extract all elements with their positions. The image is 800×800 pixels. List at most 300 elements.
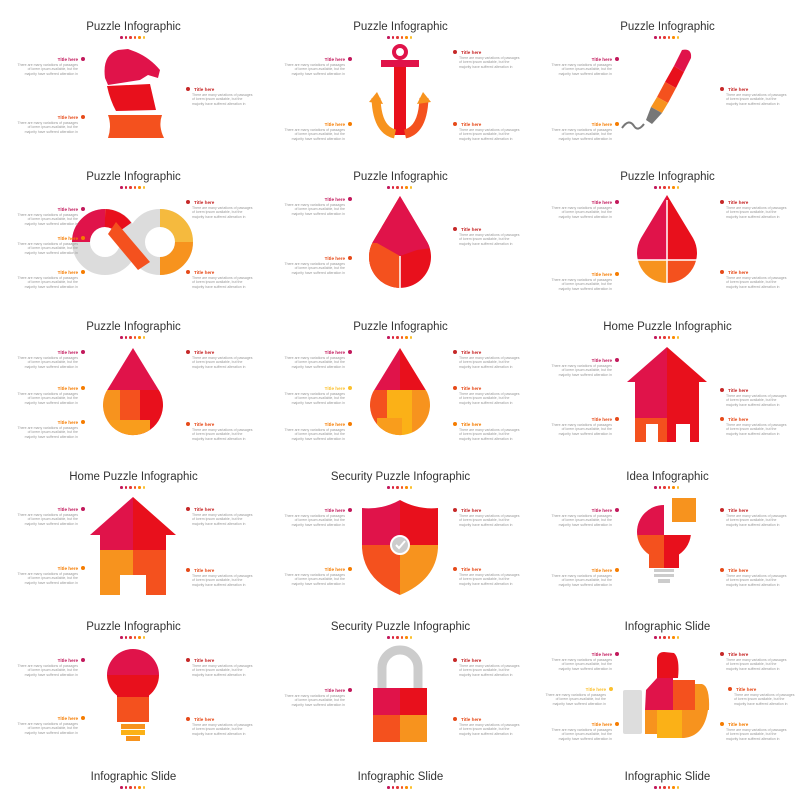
text: left 1 <box>17 207 85 226</box>
text: right 2 <box>453 122 520 141</box>
text: left 2: There are many variations of passages <box>284 392 345 396</box>
text: right 3: There are many variations of passages <box>459 428 520 432</box>
text: left 2: majority have suffered alteration in <box>559 432 612 436</box>
shield puzzle <box>362 500 438 595</box>
dots <box>387 336 415 339</box>
text: right: There are many variations of passages <box>726 93 787 97</box>
text: right 2 <box>192 717 262 736</box>
text: right: majority have suffered alteration in <box>459 242 512 246</box>
text: left 1: Title here <box>592 652 612 657</box>
title: Infographic Slide <box>358 771 443 783</box>
text: left 2: of lorem ipsum available, but the <box>28 726 78 730</box>
text: right 1: of lorem ipsum available, but the <box>459 518 509 522</box>
text: left 1: of lorem ipsum available, but the <box>28 360 78 364</box>
text: right 1: Title here <box>728 652 748 657</box>
text: right <box>186 87 253 106</box>
text: right 1: Title here <box>728 388 748 393</box>
text: right 2: of lorem ipsum available, but the <box>192 432 242 436</box>
text: right 1: Title here <box>728 508 748 513</box>
text: right 1: There are many variations of passages <box>192 206 253 210</box>
text: left 1: majority have suffered alteration in <box>25 72 78 76</box>
text: right 1: majority have suffered alteration in <box>459 523 512 527</box>
text: right 2: There are many variations of passages <box>192 574 253 578</box>
text: left 2: There are many variations of passages <box>545 693 606 697</box>
text: left 1: majority have suffered alteration in <box>292 212 345 216</box>
text: left 1 <box>551 57 619 76</box>
text: left 3: majority have suffered alteration in <box>292 437 345 441</box>
text: right 1 <box>720 200 787 219</box>
text: right 2: majority have suffered alteration in <box>192 732 245 736</box>
text: left 1: of lorem ipsum available, but the <box>562 518 612 522</box>
text: left 3: of lorem ipsum available, but the <box>28 280 78 284</box>
text: right 2: majority have suffered alteration in <box>192 583 245 587</box>
text: left 2: majority have suffered alteration in <box>292 137 345 141</box>
slide: lock <box>267 600 534 750</box>
slide: brush <box>551 21 787 141</box>
text: left 1: Title here <box>58 507 78 512</box>
text: right 2: Title here <box>728 568 748 573</box>
drop puzzle <box>370 348 430 436</box>
text: right 3: majority have suffered alteration in <box>726 737 779 741</box>
text: left 1: of lorem ipsum available, but the <box>562 368 612 372</box>
text: right 2 <box>734 687 800 706</box>
text: right 1: majority have suffered alteration in <box>192 673 245 677</box>
text: left 1 <box>275 350 345 369</box>
slide: bulb <box>17 621 253 741</box>
text: left 1: of lorem ipsum available, but the <box>295 360 345 364</box>
text: right 1 <box>192 658 262 677</box>
text: left 2 <box>284 122 352 141</box>
text: left 1 <box>542 358 612 377</box>
text: left 2: of lorem ipsum available, but the <box>295 266 345 270</box>
text: left 2: There are many variations of passages <box>284 262 345 266</box>
text: left 2: Title here <box>592 272 612 277</box>
text: right 1 <box>192 507 262 526</box>
text: left 2: There are many variations of passages <box>284 128 345 132</box>
title: Security Puzzle Infographic <box>331 471 470 483</box>
text: left 2: There are many variations of passages <box>17 392 78 396</box>
text: left 3: Title here <box>58 270 78 275</box>
text: left 1 <box>542 652 612 671</box>
dots <box>387 186 412 189</box>
text: left 1 <box>551 200 619 219</box>
text: right 2: Title here <box>194 717 214 722</box>
title: Puzzle Infographic <box>353 171 448 183</box>
text: right 2: of lorem ipsum available, but the <box>192 280 242 284</box>
text: left 1: There are many variations of passages <box>551 658 612 662</box>
text: left: Title here <box>325 688 345 693</box>
text: left 2: of lorem ipsum available, but the <box>562 132 612 136</box>
drop puzzle <box>637 195 697 283</box>
text: left 2: majority have suffered alteration in <box>559 287 612 291</box>
text: left 2: Title here <box>592 122 612 127</box>
text: right 2: of lorem ipsum available, but the <box>726 280 776 284</box>
text: left 2: majority have suffered alteration in <box>25 731 78 735</box>
text: left 1: of lorem ipsum available, but the <box>295 67 345 71</box>
text: right 1: of lorem ipsum available, but the <box>192 360 242 364</box>
slide: infinity <box>17 171 253 289</box>
slide: shield <box>284 471 520 595</box>
text: right 1: Title here <box>461 350 481 355</box>
text: left 2: Title here <box>325 256 345 261</box>
text: left 2 <box>17 386 85 405</box>
text: left 3 <box>275 422 345 441</box>
dots <box>654 336 682 339</box>
text: left 1: Title here <box>592 358 612 363</box>
text: left 2: There are many variations of passages <box>551 278 612 282</box>
text: left 2: of lorem ipsum available, but the <box>562 282 612 286</box>
text: left: of lorem ipsum available, but the <box>295 698 345 702</box>
text: left 2: majority have suffered alteration in <box>292 401 345 405</box>
title: Infographic Slide <box>625 771 710 783</box>
text: left 2: of lorem ipsum available, but the <box>28 125 78 129</box>
text: left 2 <box>551 272 619 291</box>
text: right 2: of lorem ipsum available, but the <box>459 396 509 400</box>
text: left 1: There are many variations of passages <box>17 63 78 67</box>
text: left 1 <box>542 508 612 527</box>
text: right 2 <box>459 717 529 736</box>
dots <box>654 486 682 489</box>
text: right 2: majority have suffered alteration in <box>459 582 512 586</box>
text: left 1: There are many variations of passages <box>17 213 78 217</box>
text: left 2: There are many variations of passages <box>284 573 345 577</box>
title: Puzzle Infographic <box>353 321 448 333</box>
dots <box>387 36 412 39</box>
text: right <box>720 87 787 106</box>
text: left: majority have suffered alteration in <box>292 703 345 707</box>
text: right: Title here <box>461 227 481 232</box>
text: right 1: of lorem ipsum available, but the <box>192 210 242 214</box>
text: right 2 <box>726 568 796 587</box>
text: left 2: Title here <box>58 566 78 571</box>
text: left 2: There are many variations of passages <box>17 722 78 726</box>
text: left 3: of lorem ipsum available, but the <box>295 432 345 436</box>
dots <box>120 186 145 189</box>
text: left 1: majority have suffered alteration in <box>559 215 612 219</box>
text: left 3: Title here <box>58 420 78 425</box>
text: right 1: There are many variations of passages <box>726 514 787 518</box>
text: right 1: There are many variations of passages <box>459 514 520 518</box>
text: left 3: There are many variations of passages <box>284 428 345 432</box>
text: left 2 <box>275 567 345 586</box>
text: left 1: Title here <box>592 57 612 62</box>
text: right 1: Title here <box>461 658 481 663</box>
dots <box>654 186 679 189</box>
text: left 3: majority have suffered alteration in <box>25 285 78 289</box>
text: right 2: There are many variations of passages <box>192 276 253 280</box>
text: left: There are many variations of passages <box>284 694 345 698</box>
text: left 2: There are many variations of passages <box>551 574 612 578</box>
text: left 2: Title here <box>58 236 78 241</box>
text: left 3 <box>17 270 85 289</box>
text: left 1: Title here <box>325 57 345 62</box>
text: right 1: Title here <box>194 200 214 205</box>
text: left 2: of lorem ipsum available, but the <box>562 427 612 431</box>
text: left 2 <box>8 566 78 585</box>
text: right 2: of lorem ipsum available, but the <box>459 577 509 581</box>
text: right 2: majority have suffered alteration in <box>459 137 512 141</box>
text: left 1: of lorem ipsum available, but the <box>562 662 612 666</box>
text: right 2: majority have suffered alteration in <box>734 702 787 706</box>
text: left 1: There are many variations of passages <box>17 513 78 517</box>
text: right 1: Title here <box>728 200 748 205</box>
text: right 2: of lorem ipsum available, but the <box>734 697 784 701</box>
text: left 2 <box>542 568 612 587</box>
text: left 2 <box>17 236 85 255</box>
text: left 1: There are many variations of passages <box>284 356 345 360</box>
text: left 1: There are many variations of passages <box>284 203 345 207</box>
text: right 2: of lorem ipsum available, but the <box>459 727 509 731</box>
title: Idea Infographic <box>626 471 709 483</box>
text: left 2: Title here <box>325 122 345 127</box>
slide: drop 4 pieces <box>551 171 787 291</box>
slide: drop 6 pieces <box>284 321 520 441</box>
title: Puzzle Infographic <box>86 171 181 183</box>
text: right: There are many variations of passages <box>192 93 253 97</box>
dots <box>654 786 682 789</box>
text: right 2: Title here <box>194 568 214 573</box>
text: left 2: Title here <box>586 687 606 692</box>
title: Puzzle Infographic <box>620 171 715 183</box>
drop puzzle <box>103 348 163 436</box>
text: left 1: majority have suffered alteration in <box>559 667 612 671</box>
text: left 2: of lorem ipsum available, but the <box>28 246 78 250</box>
text: right <box>453 227 520 246</box>
text: left 1 <box>275 508 345 527</box>
text: left 2 <box>275 386 345 405</box>
text: right 2: majority have suffered alteration in <box>192 437 245 441</box>
title: Infographic Slide <box>91 771 176 783</box>
infinity puzzle <box>72 209 193 275</box>
text: left 2: of lorem ipsum available, but the <box>556 697 606 701</box>
slide: drop 5 pieces <box>17 321 253 441</box>
text: left 1: There are many variations of passages <box>284 514 345 518</box>
text: right 2: There are many variations of passages <box>192 428 253 432</box>
text: right: of lorem ipsum available, but the <box>726 97 776 101</box>
text: right 1: of lorem ipsum available, but the <box>459 668 509 672</box>
text: left 1: of lorem ipsum available, but the <box>28 668 78 672</box>
text: left 1: of lorem ipsum available, but the <box>295 518 345 522</box>
text: right 1: majority have suffered alteration in <box>192 522 245 526</box>
text: left 1: majority have suffered alteration in <box>292 365 345 369</box>
text: right 3 <box>726 722 796 741</box>
title: Puzzle Infographic <box>353 21 448 33</box>
title: Puzzle Infographic <box>86 21 181 33</box>
text: right 2 <box>459 386 529 405</box>
text: left 1 <box>17 350 85 369</box>
text: right 1 <box>459 350 529 369</box>
text: left 1: Title here <box>58 57 78 62</box>
text: left 2: of lorem ipsum available, but the <box>295 132 345 136</box>
text: right 2 <box>726 417 796 436</box>
text: left 2: of lorem ipsum available, but the <box>295 577 345 581</box>
text: left 1: majority have suffered alteration in <box>559 72 612 76</box>
text: right 1: Title here <box>194 507 214 512</box>
text: left 2: There are many variations of passages <box>17 572 78 576</box>
text: right 1: of lorem ipsum available, but the <box>192 517 242 521</box>
slide: idea <box>551 471 787 587</box>
text: right: of lorem ipsum available, but the <box>459 237 509 241</box>
text: left 2: Title here <box>58 716 78 721</box>
text: right 1 <box>459 508 529 527</box>
text: right: Title here <box>194 87 214 92</box>
text: right 2: There are many variations of passages <box>459 573 520 577</box>
text: right: Title here <box>728 87 748 92</box>
text: right 2: majority have suffered alteration in <box>726 432 779 436</box>
text: right 3: of lorem ipsum available, but the <box>726 732 776 736</box>
text: left 3 <box>17 420 85 439</box>
text: right 1: There are many variations of passages <box>726 658 787 662</box>
text: left 3: There are many variations of passages <box>551 728 612 732</box>
bulb puzzle <box>107 649 159 741</box>
text: left 2: Title here <box>592 568 612 573</box>
dots <box>387 486 415 489</box>
text: right 1 <box>453 50 520 69</box>
text: right 2 <box>186 270 253 289</box>
text: left 2: Title here <box>592 417 612 422</box>
text: left 2: majority have suffered alteration in <box>25 130 78 134</box>
dots <box>654 636 682 639</box>
knight puzzle <box>104 49 164 138</box>
text: right 2: of lorem ipsum available, but the <box>192 578 242 582</box>
text: left 2 <box>17 115 85 134</box>
text: left 2: majority have suffered alteration in <box>25 251 78 255</box>
text: right 2 <box>720 270 787 289</box>
text: right 1: There are many variations of passages <box>192 664 253 668</box>
text: left 1: There are many variations of passages <box>551 364 612 368</box>
title: Home Puzzle Infographic <box>603 321 732 333</box>
text: right 1: majority have suffered alteration in <box>459 673 512 677</box>
text: left 2 <box>536 687 606 706</box>
text: right 2: There are many variations of passages <box>734 693 795 697</box>
dots <box>387 786 415 789</box>
title: Puzzle Infographic <box>86 321 181 333</box>
text: right 2: of lorem ipsum available, but the <box>726 427 776 431</box>
text: left 3: of lorem ipsum available, but the <box>562 732 612 736</box>
text: left 3: There are many variations of passages <box>17 426 78 430</box>
text: right 2 <box>192 422 262 441</box>
text: left 2: There are many variations of passages <box>17 121 78 125</box>
text: left 1: of lorem ipsum available, but the <box>562 67 612 71</box>
text: right 1: of lorem ipsum available, but the <box>726 518 776 522</box>
text: right 2: of lorem ipsum available, but the <box>192 727 242 731</box>
text: right 2: majority have suffered alteration in <box>192 285 245 289</box>
text: left 1: majority have suffered alteration in <box>559 523 612 527</box>
text: right 1: majority have suffered alteration in <box>459 65 512 69</box>
text: right 2 <box>192 568 262 587</box>
text: right 1: There are many variations of passages <box>726 206 787 210</box>
text: left 2 <box>542 417 612 436</box>
text: right 1: Title here <box>194 658 214 663</box>
dots <box>120 486 148 489</box>
bulb puzzle <box>637 498 696 583</box>
text: right: of lorem ipsum available, but the <box>192 97 242 101</box>
text: left 3: majority have suffered alteration in <box>25 435 78 439</box>
title: Security Puzzle Infographic <box>331 621 470 633</box>
text: left 2: majority have suffered alteration in <box>553 702 606 706</box>
title: Puzzle Infographic <box>620 21 715 33</box>
text: left 3: Title here <box>592 722 612 727</box>
text: left 1: Title here <box>592 508 612 513</box>
text: left 2: majority have suffered alteration in <box>292 582 345 586</box>
text: right 1 <box>726 508 796 527</box>
lock puzzle <box>267 600 534 750</box>
text: right 1: majority have suffered alteration in <box>726 215 779 219</box>
text: right 1: majority have suffered alteration in <box>726 403 779 407</box>
text: right 1: of lorem ipsum available, but the <box>726 662 776 666</box>
slide: drop 3 pieces <box>284 171 520 288</box>
text: left 1: Title here <box>58 350 78 355</box>
text: right 1: Title here <box>461 508 481 513</box>
text: left 3: Title here <box>325 422 345 427</box>
text: left 1: Title here <box>58 207 78 212</box>
dots <box>120 636 148 639</box>
text: left 1: There are many variations of passages <box>551 206 612 210</box>
text: left 2 <box>8 716 78 735</box>
text: right 2 <box>459 567 529 586</box>
anchor puzzle <box>369 44 431 138</box>
title: Infographic Slide <box>625 621 710 633</box>
house puzzle <box>0 450 267 600</box>
house puzzle <box>534 300 800 450</box>
text: right: majority have suffered alteration in <box>726 102 779 106</box>
text: left 3: There are many variations of passages <box>17 276 78 280</box>
text: left 2: majority have suffered alteration in <box>25 581 78 585</box>
text: left 2: There are many variations of passages <box>551 128 612 132</box>
text: right 2: Title here <box>461 717 481 722</box>
text: left 1: of lorem ipsum available, but the <box>562 210 612 214</box>
text: right 2: There are many variations of passages <box>726 423 787 427</box>
text: left 1: majority have suffered alteration in <box>25 522 78 526</box>
text: left 1: majority have suffered alteration in <box>292 72 345 76</box>
text: left 2: Title here <box>58 115 78 120</box>
text: right 1: majority have suffered alteration in <box>192 365 245 369</box>
text: right 1 <box>459 658 529 677</box>
text: left 1 <box>8 507 78 526</box>
text: left 2: of lorem ipsum available, but the <box>28 396 78 400</box>
text: right 3: majority have suffered alteration in <box>459 437 512 441</box>
text: right 1: Title here <box>194 350 214 355</box>
text: right 1: of lorem ipsum available, but the <box>459 60 509 64</box>
text: right 2: majority have suffered alteration in <box>459 732 512 736</box>
text: right 2: There are many variations of passages <box>459 392 520 396</box>
text: left 2: There are many variations of passages <box>551 423 612 427</box>
text: right 2: Title here <box>461 122 481 127</box>
text: left 1 <box>284 57 352 76</box>
text: right 1: of lorem ipsum available, but the <box>726 210 776 214</box>
text: right 2: There are many variations of passages <box>459 128 520 132</box>
text: right 1: There are many variations of passages <box>459 56 520 60</box>
text: left 1 <box>284 197 352 216</box>
text: left 1: Title here <box>325 197 345 202</box>
text: right 1 <box>726 652 796 671</box>
text: right 2: Title here <box>461 386 481 391</box>
slide: thumbs up <box>534 600 800 750</box>
text: left 1 <box>17 57 85 76</box>
text: right: majority have suffered alteration in <box>192 102 245 106</box>
text: left 1: of lorem ipsum available, but the <box>295 207 345 211</box>
text: right 3 <box>459 422 529 441</box>
text: right 2: There are many variations of passages <box>459 723 520 727</box>
text: right 1: There are many variations of passages <box>192 513 253 517</box>
text: left 3 <box>542 722 612 741</box>
text: left 2: of lorem ipsum available, but the <box>562 578 612 582</box>
text: left 2: Title here <box>325 567 345 572</box>
text: left 1: Title here <box>325 350 345 355</box>
text: right 2: majority have suffered alteration in <box>726 583 779 587</box>
text: right 1 <box>726 388 796 407</box>
slide: home 2 <box>0 450 267 600</box>
